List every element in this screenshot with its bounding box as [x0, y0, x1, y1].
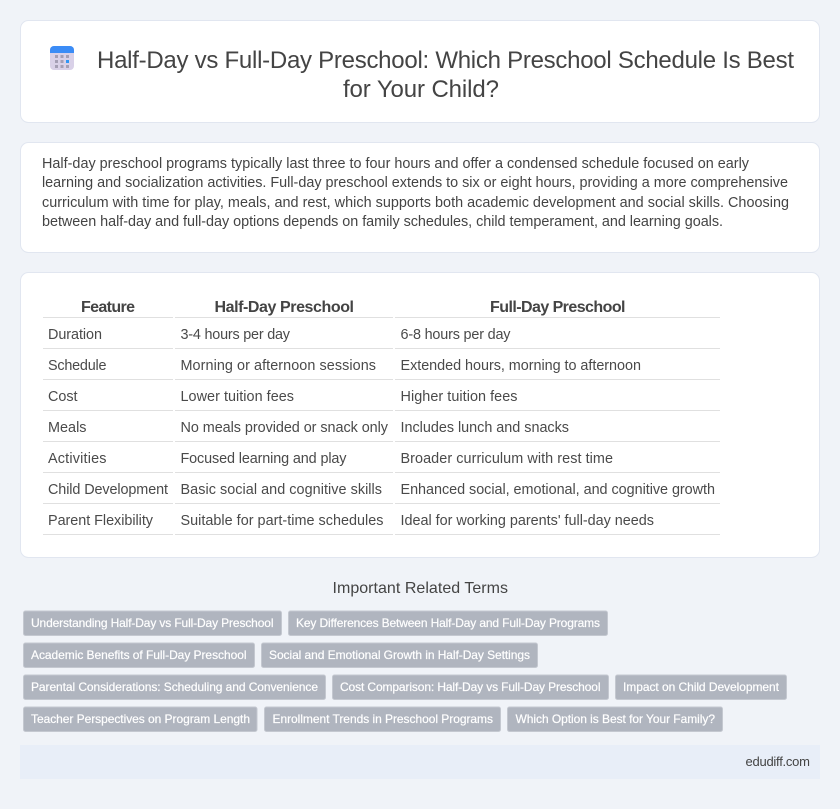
- tag: Social and Emotional Growth in Half-Day Settings: [269, 648, 530, 662]
- tag: Cost Comparison: Half-Day vs Full-Day Preschool: [340, 680, 600, 694]
- tag: Understanding Half-Day vs Full-Day Preschool: [31, 616, 274, 630]
- title: Half-Day vs Full-Day Preschool: Which Preschool Schedule Is Best: [97, 47, 794, 74]
- row: activities: Activities: [48, 451, 106, 467]
- tag: Key Differences Between Half-Day and Full-Day Programs: [296, 616, 600, 630]
- row: activities: Focused learning and play: [180, 451, 347, 467]
- tag: [24, 675, 326, 700]
- row: duration: 6-8 hours per day: [400, 327, 511, 343]
- footer: [20, 745, 820, 779]
- row: schedule: Morning or afternoon sessions: [180, 358, 376, 374]
- tag: [262, 643, 538, 668]
- title: [97, 47, 794, 103]
- panel: related term tags: [24, 611, 786, 732]
- row: child development: Basic social and cognitive skills: [180, 482, 382, 498]
- row: duration: Duration: [48, 327, 102, 343]
- panel: comparison table: [20, 272, 820, 558]
- row: parent flexibility: [48, 513, 654, 529]
- row: meals: Meals: [48, 420, 86, 436]
- tag: Impact on Child Development: [623, 680, 780, 694]
- panel: introduction text: between half-day and full-day options depends on family schedules, child temperament, and learning goals.: [42, 214, 723, 230]
- row: parent flexibility: Suitable for part-time schedules: [180, 513, 384, 529]
- tag: [616, 675, 786, 700]
- row: cost: Cost: [48, 389, 78, 405]
- heading: important related terms: Important Related Terms: [332, 580, 508, 597]
- table header row: Full-Day Preschool: [490, 299, 626, 316]
- table header row: Half-Day Preschool: [214, 299, 354, 316]
- row: child development: [48, 482, 715, 498]
- tag: Enrollment Trends in Preschool Programs: [272, 712, 493, 726]
- panel: introduction text: [20, 142, 820, 252]
- table header row: [81, 299, 626, 316]
- row: parent flexibility: Ideal for working parents' full-day needs: [400, 513, 654, 529]
- row: schedule: [48, 358, 641, 374]
- table header row: Feature: [81, 299, 135, 316]
- row: cost: [48, 389, 518, 405]
- panel: introduction text: learning and socialization activities. Full-day preschool extends to six or eight hours, providing a more comprehensive: [42, 175, 788, 191]
- tag: Which Option is Best for Your Family?: [516, 712, 715, 726]
- row: schedule: Extended hours, morning to afternoon: [400, 358, 641, 374]
- row: duration: [48, 327, 511, 343]
- panel: introduction text: curriculum with time for play, meals, and rest, which supports both academic development and social skills. Choosing: [42, 195, 789, 211]
- row: child development: Child Development: [48, 482, 168, 498]
- row: cost: Higher tuition fees: [400, 389, 518, 405]
- tag: [24, 611, 282, 636]
- row: activities: Broader curriculum with rest time: [400, 451, 613, 467]
- tag: Teacher Perspectives on Program Length: [31, 712, 250, 726]
- tag: [24, 707, 257, 732]
- row: meals: [48, 420, 569, 436]
- footer: edudiff.com: [746, 754, 810, 769]
- title: for Your Child?: [343, 76, 499, 103]
- tag: [332, 675, 608, 700]
- tag: [288, 611, 608, 636]
- panel: header: [20, 20, 820, 122]
- row: meals: No meals provided or snack only: [180, 420, 389, 436]
- tag: [264, 707, 500, 732]
- row: duration: 3-4 hours per day: [180, 327, 291, 343]
- row: parent flexibility: Parent Flexibility: [48, 513, 154, 529]
- tag: Academic Benefits of Full-Day Preschool: [31, 648, 246, 662]
- row: cost: Lower tuition fees: [180, 389, 294, 405]
- panel: introduction text: Half-day preschool programs typically last three to four hours and offer a condensed schedule focused on early: [42, 156, 750, 172]
- row: activities: [48, 451, 613, 467]
- tag: [24, 643, 254, 668]
- row: meals: Includes lunch and snacks: [400, 420, 569, 436]
- tag: [508, 707, 722, 732]
- row: child development: Enhanced social, emotional, and cognitive growth: [400, 482, 715, 498]
- icon: calendar: [50, 46, 74, 70]
- row: schedule: Schedule: [48, 358, 106, 374]
- tag: Parental Considerations: Scheduling and Convenience: [31, 680, 318, 694]
